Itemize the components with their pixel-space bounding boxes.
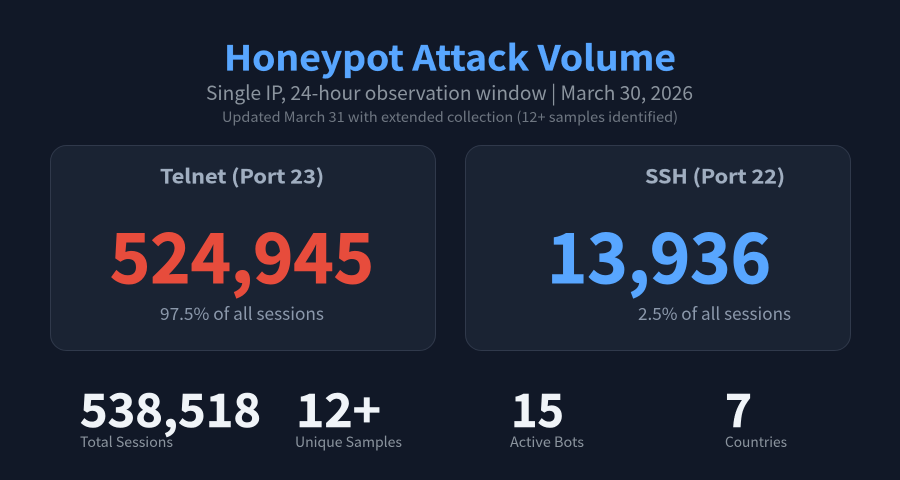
stat: countries [725,375,787,452]
ssh value: 13,936 [547,203,771,303]
panel: telnet [50,146,436,350]
header [206,30,693,127]
telnet share: 97.5% of all sessions [160,300,324,325]
stat: unique samples: Unique Samples [295,432,402,452]
telnet value: 524,945 [110,203,374,303]
stat: active bots [510,375,584,452]
stat: unique samples [295,375,402,452]
telnet heading: Telnet (Port 23) [160,160,324,190]
stat: total sessions: 538,518 [80,375,261,441]
stat: countries: 7 [725,375,752,441]
ssh share: 2.5% of all sessions [638,300,791,325]
ssh heading: SSH (Port 22) [645,160,785,190]
stat: total sessions: Total Sessions [80,432,173,452]
panel: ssh [466,146,850,350]
stat: unique samples: 12+ [296,375,381,441]
title: Honeypot Attack Volume [224,30,676,80]
stat: active bots: Active Bots [510,432,584,452]
update note: Updated March 31 with extended collection (12+ samples identified) [222,107,678,127]
subtitle: Single IP, 24-hour observation window | March 30, 2026 [206,77,693,106]
stat: active bots: 15 [511,375,564,441]
stat: countries: Countries [725,432,787,452]
